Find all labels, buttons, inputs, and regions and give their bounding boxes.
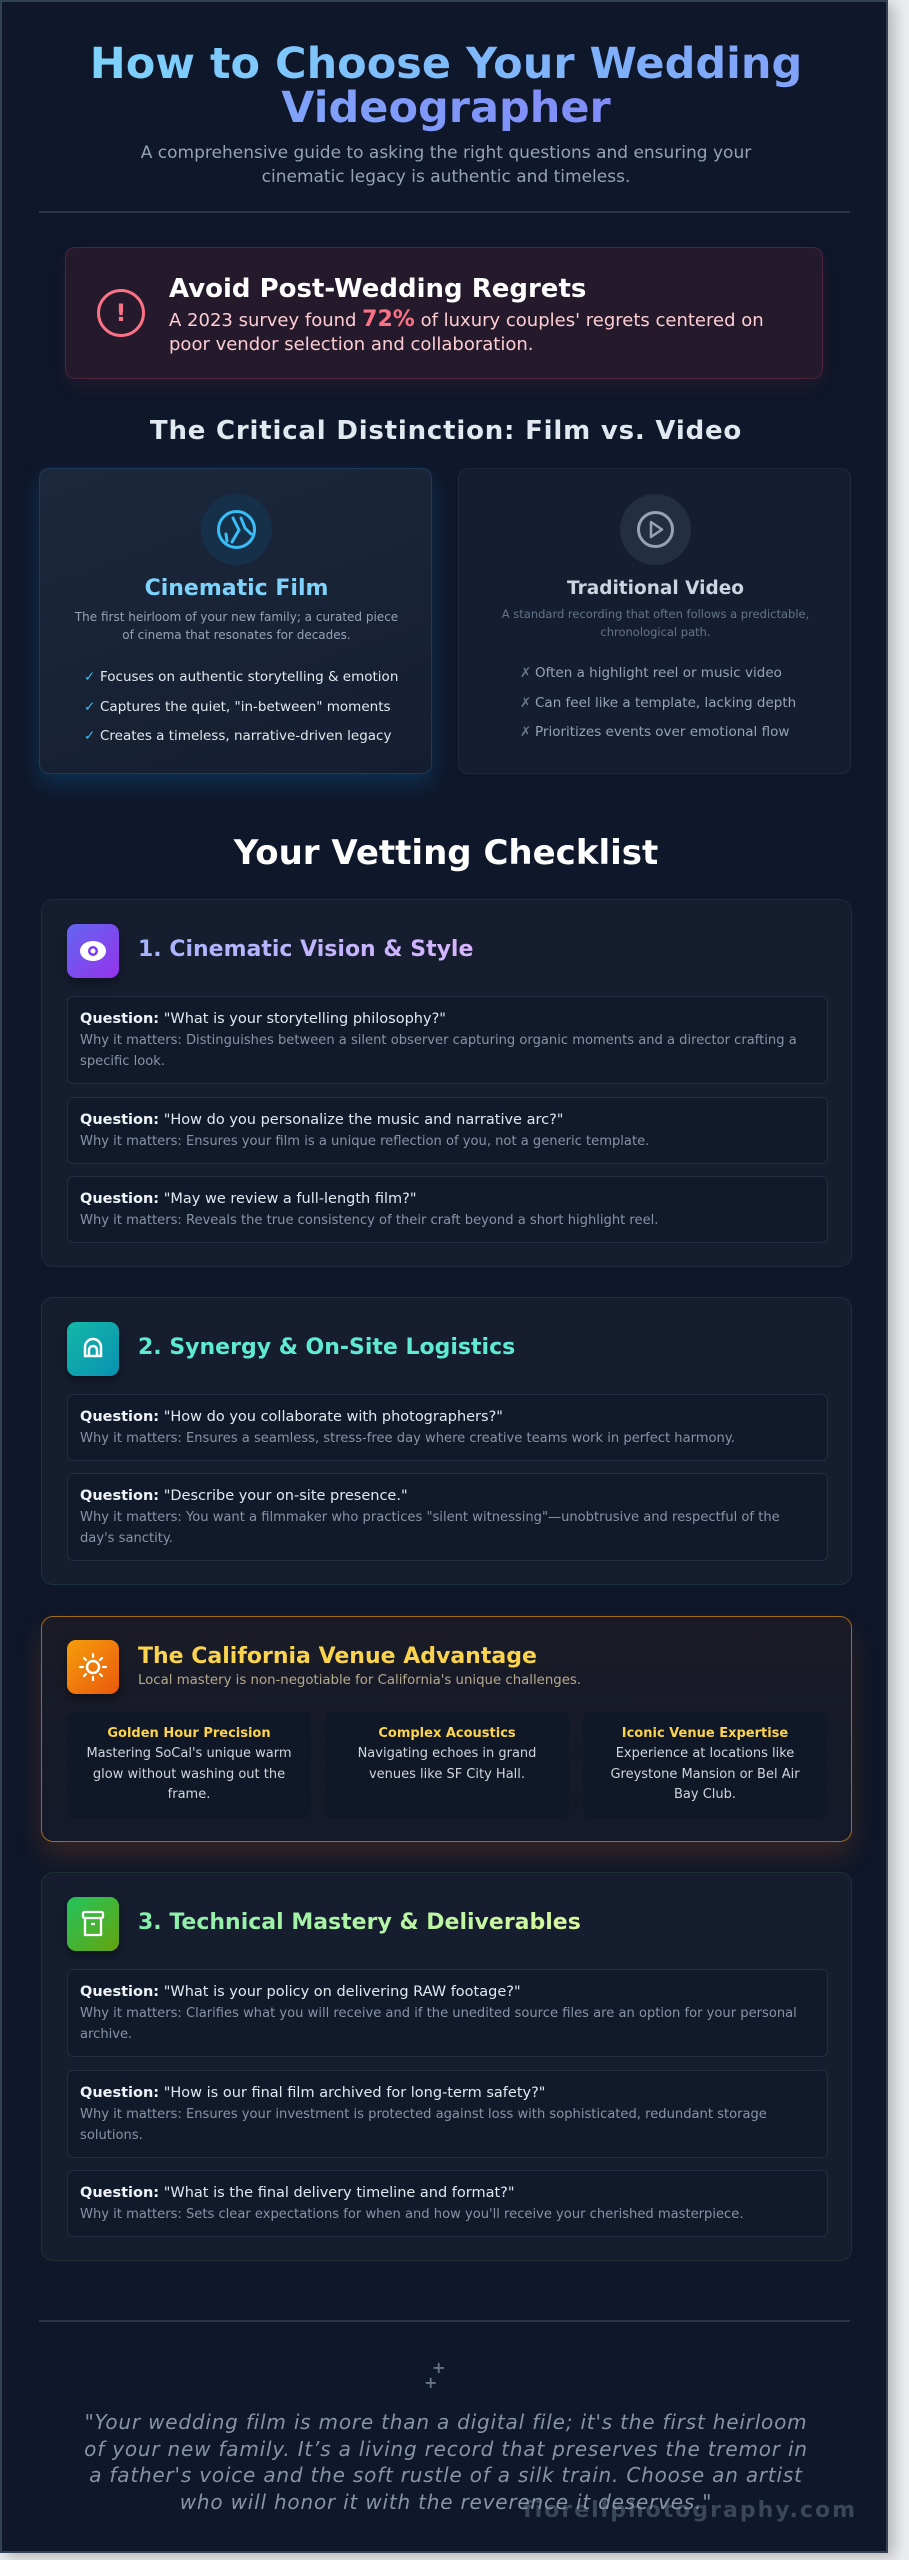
card title: Traditional Video [567, 578, 744, 599]
callout text: A 2023 survey found 72% of luxury couples' regrets centered on poor vendor selection and collaboration. [169, 307, 764, 355]
question 1: Why it matters: Distinguishes between a silent observer capturing organic moments and a director crafting a specific look. [80, 1033, 797, 1069]
panel: cinematic film [39, 468, 432, 774]
list: film benefits: ✓ [84, 728, 95, 744]
callout heading: Avoid Post-Wedding Regrets [169, 274, 586, 304]
list: video drawbacks: Prioritizes events over emotional flow [535, 724, 789, 740]
question 2: Why it matters: You want a filmmaker who practices "silent witnessing"—unobtrusive and respectful of the day's sanctity. [80, 1510, 780, 1546]
list: film benefits: Captures the quiet, "in-between" moments [100, 698, 391, 714]
question 1: Why it matters: Clarifies what you will receive and if the unedited source files are an option for your personal archive. [80, 2006, 797, 2042]
question 1: Question: "What is your storytelling philosophy?" [80, 1011, 446, 1027]
heading: film vs video: The Critical Distinction: Film vs. Video [150, 416, 742, 446]
list: film benefits: Creates a timeless, narrative-driven legacy [100, 728, 391, 744]
watermark: fiorellphotography.com [523, 2498, 857, 2523]
item: acoustics [325, 1712, 569, 1818]
section title: 3. Technical Mastery & Deliverables [138, 1910, 581, 1935]
question 2 [67, 2070, 828, 2158]
panel: section 3 [41, 1872, 852, 2261]
question 1: Question: "What is your policy on delivering RAW footage?" [80, 1984, 521, 2000]
list: film benefits: ✓ [84, 698, 95, 714]
list: video drawbacks: ✗ [520, 694, 531, 710]
question 1 [67, 996, 828, 1084]
panel title: The California Venue Advantage [138, 1644, 537, 1669]
panel: section 2 [41, 1297, 852, 1585]
list: film benefits: Focuses on authentic storytelling & emotion [100, 669, 398, 685]
quote [84, 2410, 808, 2514]
question 3: Question: "May we review a full-length film?" [80, 1191, 416, 1207]
question 2: Question: "How do you personalize the music and narrative arc?" [80, 1112, 563, 1128]
icon: quote mark [424, 2358, 445, 2392]
icon: quote mark: + [424, 2373, 437, 2392]
panel subtitle: Local mastery is non-negotiable for California's unique challenges. [138, 1673, 581, 1688]
item: golden hour: Golden Hour Precision [107, 1726, 271, 1741]
question 3: Why it matters: Reveals the true consistency of their craft beyond a short highlight reel. [80, 1213, 658, 1228]
icon: alert: ! [116, 299, 126, 327]
question 3: Why it matters: Sets clear expectations for when and how you'll receive your cherished masterpiece. [80, 2207, 743, 2222]
section title: 1. Cinematic Vision & Style [138, 937, 473, 962]
quote: of your new family. It’s a living record that preserves the tremor in [84, 2437, 808, 2461]
card title: Cinematic Film [145, 576, 328, 601]
icon: play [620, 494, 691, 565]
question 3: Question: "What is the final delivery timeline and format?" [80, 2185, 515, 2201]
question 3 [67, 1176, 828, 1243]
card description: A standard recording that often follows a predictable, chronological path. [502, 607, 809, 639]
item: acoustics: Navigating echoes in grand venues like SF City Hall. [358, 1746, 536, 1782]
title [90, 39, 802, 133]
question 1 [67, 1969, 828, 2057]
icon: synergy [67, 1322, 119, 1376]
question 3 [67, 2170, 828, 2237]
callout: avoid regrets [65, 247, 823, 379]
icon: film [201, 494, 272, 565]
item: golden hour [67, 1712, 311, 1818]
question 2: Question: "How is our final film archived for long-term safety?" [80, 2085, 545, 2101]
item: iconic venues: Iconic Venue Expertise [622, 1726, 788, 1741]
list: film benefits [84, 669, 398, 744]
list: video drawbacks: Often a highlight reel or music video [535, 665, 782, 681]
icon: quote mark: + [432, 2358, 445, 2377]
question 1: Why it matters: Ensures a seamless, stress-free day where creative teams work in perfect harmony. [80, 1431, 735, 1446]
panel: traditional video [458, 468, 851, 774]
question 2: Why it matters: Ensures your investment is protected against loss with sophisticated, redundant storage solutions. [80, 2107, 767, 2143]
question 1: Question: "How do you collaborate with photographers?" [80, 1409, 503, 1425]
subtitle: A comprehensive guide to asking the right questions and ensuring your cinematic legacy is authentic and timeless. [141, 143, 751, 187]
quote: "Your wedding film is more than a digital file; it's the first heirloom [85, 2410, 807, 2434]
title: How to Choose Your Wedding [90, 39, 802, 89]
icon: archive [67, 1897, 119, 1951]
quote: a father's voice and the soft rustle of a silk train. Choose an artist [89, 2463, 803, 2487]
icon: sun [67, 1640, 119, 1694]
list: film benefits: ✓ [84, 669, 95, 685]
quote: who will honor it with the reverence it deserves." [180, 2490, 712, 2514]
list: video drawbacks: ✗ [520, 665, 531, 681]
question 2 [67, 1097, 828, 1164]
item: golden hour: Mastering SoCal's unique warm glow without washing out the frame. [86, 1746, 292, 1802]
panel: california venue advantage [41, 1616, 852, 1842]
panel: section 1 [41, 899, 852, 1267]
section title: 2. Synergy & On-Site Logistics [138, 1335, 515, 1360]
list: video drawbacks [520, 665, 796, 740]
question 2 [67, 1473, 828, 1561]
item: iconic venues: Experience at locations like Greystone Mansion or Bel Air Bay Club. [610, 1746, 800, 1802]
question 2: Question: "Describe your on-site presence." [80, 1488, 408, 1504]
list: video drawbacks: ✗ [520, 724, 531, 740]
icon: eye [67, 924, 119, 978]
heading: vetting checklist: Your Vetting Checklist [234, 833, 658, 873]
question 1 [67, 1394, 828, 1461]
question 2: Why it matters: Ensures your film is a unique reflection of you, not a generic template. [80, 1134, 649, 1149]
item: iconic venues [583, 1712, 827, 1818]
list: video drawbacks: Can feel like a template, lacking depth [535, 694, 796, 710]
title: Videographer [281, 83, 611, 133]
icon: alert [97, 289, 145, 337]
card description: The first heirloom of your new family; a curated piece of cinema that resonates for decades. [75, 610, 398, 642]
item: acoustics: Complex Acoustics [378, 1726, 516, 1741]
